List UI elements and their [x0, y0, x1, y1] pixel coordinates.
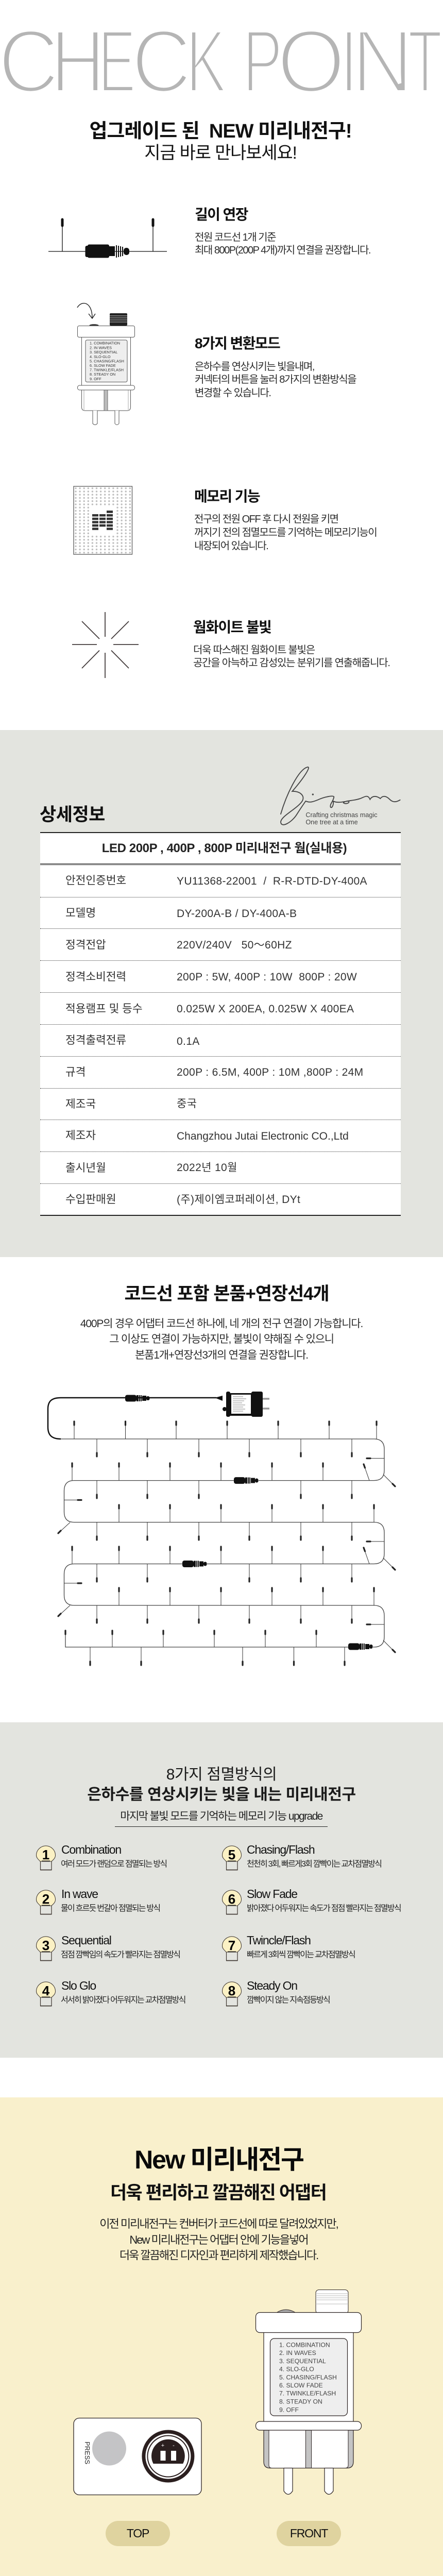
heading: cord set: 코드선 포함 본품+연장선4개 — [124, 1284, 329, 1304]
diagram: wiring — [47, 1392, 396, 1666]
text: description: 커넥터의 버튼을 눌러 8가지의 변환방식을 — [195, 374, 356, 385]
heading: upgrade intro: 지금 바로 만나보세요! — [144, 143, 297, 163]
panel: new adapter background — [0, 2097, 443, 2576]
icon: light burst — [72, 612, 139, 678]
text: description: 꺼지기 전의 점멸모드를 기억하는 메모리기능이 — [194, 527, 377, 538]
text: description: 더욱 따스해진 웜화이트 불빛은 — [193, 645, 315, 656]
text: description — [193, 645, 390, 669]
icon: adapter with press arrow: 7. TWINKLE/FLASH — [90, 368, 124, 372]
text: description: 은하수를 연상시키는 빛을내며, — [195, 361, 314, 372]
mode 5: 5 — [228, 1847, 235, 1862]
illustration: adapter front view: 6. SLOW FADE — [279, 2382, 323, 2389]
illustration: adapter front view: 2. IN WAVES — [279, 2349, 316, 2357]
text: description: 내장되어 있습니다. — [194, 540, 268, 552]
mode 2 — [36, 1887, 160, 1914]
mode 5: Chasing/Flash — [247, 1843, 314, 1856]
feature: warm white — [72, 612, 390, 678]
row: size: 규격 — [65, 1066, 86, 1078]
text: cord set description: 그 이상도 연결이 가능하지만, 불빛이 약해질 수 있으니 — [109, 1333, 334, 1345]
heading: eight modes: 8가지 점멸방식의 — [166, 1766, 277, 1783]
illustration: adapter top view: PRESS — [83, 2442, 91, 2464]
illustration: adapter top view: + — [161, 2443, 164, 2449]
icon: adapter with press arrow: 2. IN WAVES — [90, 345, 112, 350]
mode 8: Steady On — [247, 1979, 297, 1992]
mode 5: 천천히 3회, 빠르게3회 깜빡이는 교차점멸방식 — [247, 1860, 381, 1869]
row: voltage: 정격전압 — [65, 939, 106, 951]
heading: 상세정보: 상세정보 — [40, 805, 105, 825]
mode 5 — [222, 1843, 381, 1870]
subheading: adapter: 더욱 편리하고 깔끔해진 어댑터 — [110, 2183, 326, 2203]
text: description — [195, 361, 356, 399]
illustration: adapter front view — [255, 2290, 362, 2495]
logo: Bisom signature: One tree at a time — [305, 819, 358, 826]
mode 3: Sequential — [61, 1934, 111, 1947]
mode 6 — [222, 1887, 401, 1914]
text: cord set description: 400P의 경우 어댑터 코드선 하나에, 네 개의 전구 연결이 가능합니다. — [80, 1318, 363, 1330]
label: TOP: TOP — [127, 2527, 149, 2540]
mode 6: Slow Fade — [247, 1887, 297, 1901]
logo: Bisom signature — [280, 767, 401, 826]
mode 8 — [222, 1979, 330, 2006]
text: 0.025W X 200EA, 0.025W X 400EA — [177, 1003, 354, 1015]
mode 1: 1 — [42, 1847, 49, 1862]
heading: New 미리내전구: New 미리내전구 — [134, 2145, 303, 2174]
mode 3: 3 — [42, 1938, 49, 1953]
row: certification: 안전인증번호 — [65, 874, 126, 887]
table heading: LED 200P , 400P , 800P 미리내전구 웜(실내용) — [102, 841, 347, 855]
heading: 8가지 변환모드: 8가지 변환모드 — [195, 335, 280, 351]
mode 4: 4 — [42, 1983, 50, 1998]
text: cord set description — [80, 1318, 363, 1361]
label: FRONT: FRONT — [290, 2527, 328, 2540]
text: description — [195, 232, 370, 256]
heading: 길이 연장: 길이 연장 — [195, 207, 248, 223]
wire run — [48, 1398, 395, 1665]
text: description: 공간을 아늑하고 감성있는 분위기를 연출해줍니다. — [193, 657, 390, 669]
text: (주)제이엠코퍼레이션, DYt — [177, 1194, 300, 1206]
illustration: adapter front view: 8. STEADY ON — [279, 2398, 322, 2405]
text: adapter description: 이전 미리내전구는 컨버터가 코드선에 따로 달려있었지만, — [99, 2217, 338, 2230]
illustration: adapter front view: 9. OFF — [279, 2406, 299, 2413]
heading: upgrade intro: 업그레이드 된 NEW 미리내전구! — [89, 121, 352, 142]
subheading: memory upgrade — [115, 1808, 328, 1827]
text: 220V/240V 50～60HZ — [177, 939, 292, 951]
text: description: 전구의 전원 OFF 후 다시 전원을 키면 — [194, 514, 338, 525]
illustration: adapter top view — [73, 2417, 202, 2496]
heading: eight modes: 은하수를 연상시키는 빛을 내는 미리내전구 — [87, 1786, 356, 1803]
row: lamp: 적용램프 및 등수 — [65, 1003, 143, 1015]
row: release: 출시년월 — [65, 1162, 106, 1174]
text: 중국 — [177, 1098, 197, 1110]
illustration: adapter front view: 5. CHASING/FLASH — [279, 2374, 337, 2381]
icon: adapter with press arrow: 1. COMBINATION — [90, 341, 120, 345]
text: adapter description — [99, 2217, 338, 2262]
logo: Bisom signature: Crafting christmas magic — [305, 811, 378, 819]
heading: upgrade intro — [89, 121, 352, 163]
mode 8: 8 — [228, 1983, 235, 1998]
illustration: adapter front view: 3. SEQUENTIAL — [279, 2358, 326, 2365]
mode 7: Twincle/Flash — [247, 1934, 311, 1947]
heading: 웜화이트 불빛: 웜화이트 불빛 — [193, 619, 271, 635]
mode 1 — [36, 1843, 167, 1870]
feature: 8 mode — [77, 303, 356, 425]
icon: wire with connector — [48, 218, 167, 258]
heading: eight modes — [87, 1766, 356, 1803]
row: importer: 수입판매원 — [65, 1193, 116, 1206]
mode 4: Slo Glo — [61, 1979, 96, 1992]
mode 1: Combination — [61, 1843, 121, 1856]
text: Changzhou Jutai Electronic CO.,Ltd — [177, 1130, 349, 1142]
text: description: 변경할 수 있습니다. — [195, 387, 270, 399]
adapter — [215, 1392, 269, 1417]
row: current: 정격출력전류 — [65, 1034, 126, 1046]
row: maker: 제조자 — [65, 1129, 96, 1142]
illustration: adapter front view: 1. COMBINATION — [279, 2341, 330, 2348]
mode 7: 7 — [228, 1938, 235, 1953]
table: specification — [40, 832, 401, 1216]
text: 2022년 10월 — [177, 1162, 237, 1174]
mode 3: 점점 깜빡임의 속도가 빨라지는 점멸방식 — [61, 1951, 180, 1959]
mode 7 — [222, 1934, 355, 1961]
title: CHECK POINT — [0, 21, 442, 98]
panel: specification background — [0, 730, 443, 1257]
icon: memory dot grid — [73, 486, 133, 555]
icon: adapter with press arrow: 8. STEADY ON — [90, 372, 115, 377]
text: description: 최대 800P(200P 4개)까지 연결을 권장합니다. — [195, 245, 370, 256]
label: FRONT — [277, 2521, 341, 2546]
panel: eight modes background — [0, 1722, 443, 2058]
icon: adapter with press arrow: 3. SEQUENTIAL — [90, 350, 117, 354]
label: TOP — [106, 2521, 170, 2546]
mode 3 — [36, 1934, 180, 1961]
icon: adapter with press arrow: 4. SLO-GLO — [90, 354, 111, 359]
feature: memory — [73, 486, 377, 555]
row: country: 제조국 — [65, 1098, 96, 1110]
text: 200P : 5W, 400P : 10W 800P : 20W — [177, 971, 357, 983]
text: DY-200A-B / DY-400A-B — [177, 908, 297, 920]
icon: adapter with press arrow: 9. OFF — [90, 377, 101, 381]
text: description — [194, 514, 377, 552]
row: power: 정격소비전력 — [65, 971, 126, 983]
illustration: adapter front view: 7. TWINKLE/FLASH — [279, 2389, 336, 2397]
connectors — [125, 1395, 373, 1651]
mode 2: 2 — [42, 1891, 49, 1907]
text: 200P : 6.5M, 400P : 10M ,800P : 24M — [177, 1066, 363, 1078]
mode 7: 빠르게 3회씩 깜빡이는 교차점멸방식 — [247, 1951, 355, 1959]
mode 8: 깜빡이지 않는 지속점등방식 — [247, 1996, 330, 2005]
illustration: adapter front view: 4. SLO-GLO — [279, 2366, 314, 2373]
mode 2: 물이 흐르듯 번갈아 점멸되는 방식 — [61, 1904, 160, 1913]
mode 2: In wave — [61, 1887, 98, 1901]
row: model: 모델명 — [65, 907, 96, 919]
icon: adapter with press arrow: 6. SLOW FADE — [90, 363, 116, 368]
text: description: 전원 코드선 1개 기준 — [195, 232, 276, 243]
illustration: adapter top view: - — [173, 2443, 175, 2449]
text: 0.1A — [177, 1036, 200, 1047]
heading: 메모리 기능: 메모리 기능 — [194, 488, 260, 504]
mode 6: 6 — [228, 1891, 235, 1907]
mode 6: 밝아졌다 어두워지는 속도가 점점 빨라지는 점멸방식 — [247, 1904, 401, 1913]
text: adapter description: 더욱 깔끔해진 디자인과 편리하게 제작했습니다. — [120, 2249, 318, 2262]
icon: adapter with press arrow — [77, 303, 135, 425]
mode 4 — [36, 1979, 185, 2006]
text: cord set description: 본품1개+연장선3개의 연결을 권장합니다. — [135, 1349, 308, 1361]
mode 4: 서서히 밝아졌다 어두워지는 교차점멸방식 — [61, 1996, 185, 2005]
subheading: memory upgrade: 마지막 불빛 모드를 기억하는 메모리 기능 upgrade — [120, 1810, 322, 1822]
feature: length extension — [48, 207, 370, 258]
icon: adapter with press arrow: 5. CHASING/FLASH — [90, 359, 124, 364]
mode 1: 여러 모드가 랜덤으로 점멸되는 방식 — [61, 1860, 166, 1869]
text: adapter description: New 미리내전구는 어댑터 안에 기능을넣어 — [129, 2233, 308, 2246]
text: YU11368-22001 / R-R-DTD-DY-400A — [177, 875, 367, 887]
